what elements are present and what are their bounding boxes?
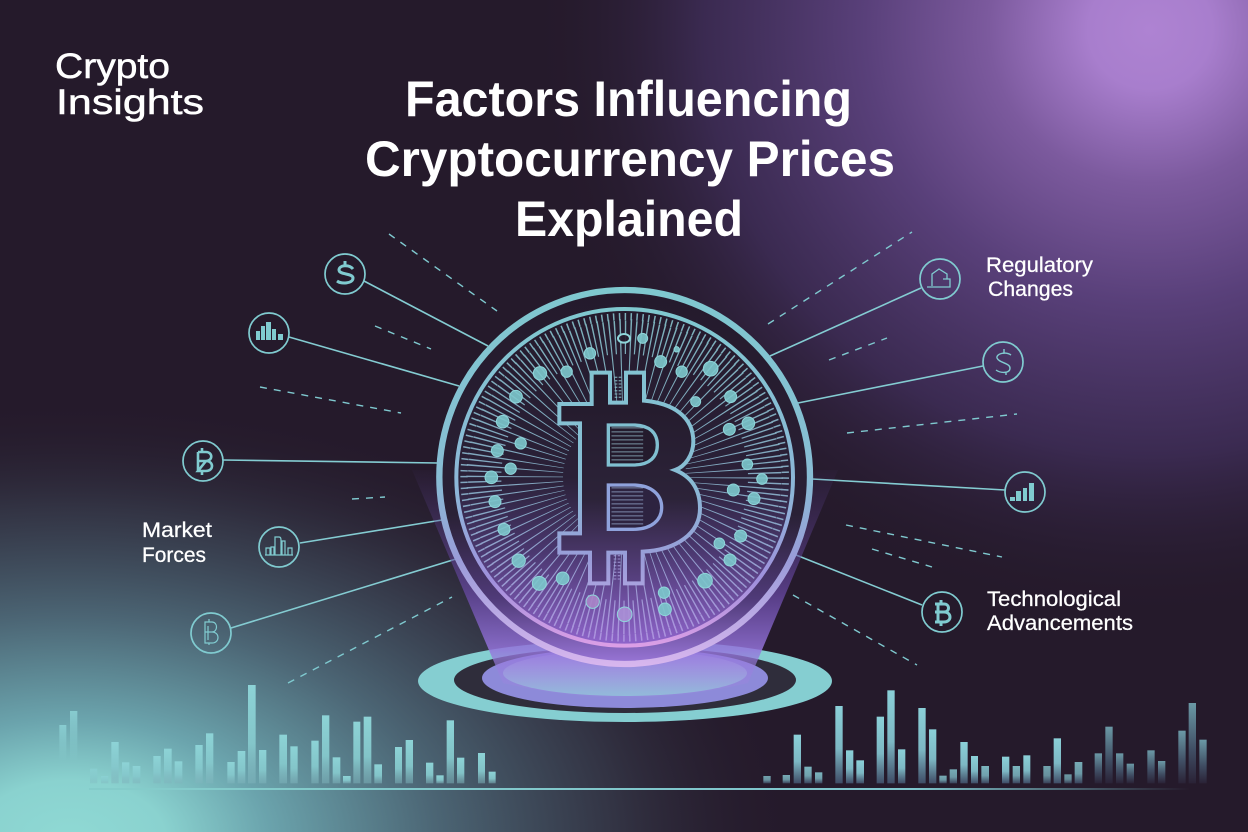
connector lines from coin to icons — [223, 281, 1005, 628]
title: Factors Influencing — [405, 71, 852, 127]
label: Regulatory Changes — [986, 254, 1094, 301]
icon: dollar top left — [325, 254, 365, 294]
bar chart axis — [89, 788, 1190, 790]
icon: bar chart upper left — [249, 313, 289, 353]
icon: bitcoin left — [183, 441, 223, 481]
label: Market Forces — [142, 519, 212, 567]
icon: outlined bitcoin lower left — [191, 613, 231, 653]
brand logo text: Crypto Insights: Crypto — [55, 47, 170, 86]
projection light beam — [412, 470, 838, 698]
bar chart: right — [763, 690, 1207, 783]
label: Market Forces: Forces — [142, 544, 206, 567]
radial rays — [464, 317, 785, 638]
icon: rising bars right — [1005, 472, 1045, 512]
lower counter — [608, 485, 662, 529]
icon: building top right — [920, 259, 960, 299]
hologram platform — [418, 640, 832, 722]
bitcoin coin — [439, 290, 810, 664]
icon: dollar right — [983, 342, 1023, 382]
label: Market Forces: Market — [142, 519, 212, 542]
label: Regulatory Changes: Changes — [988, 278, 1073, 301]
circuit nodes — [485, 333, 767, 622]
upper counter — [608, 425, 657, 465]
title: Cryptocurrency Prices — [365, 131, 895, 187]
label: Technological Advancements: Technological — [987, 588, 1121, 611]
title — [365, 71, 895, 247]
brand logo text: Crypto Insights: Insights — [56, 83, 204, 122]
coin inner disc — [456, 309, 793, 646]
brand logo text: Crypto Insights — [55, 47, 204, 122]
label: Regulatory Changes: Regulatory — [986, 254, 1094, 277]
label: Technological Advancements: Advancements — [987, 612, 1133, 635]
label: Technological Advancements — [987, 588, 1133, 635]
bitcoin symbol — [559, 373, 700, 583]
icon: outlined bars lower left — [259, 527, 299, 567]
icon: bitcoin lower right — [922, 592, 962, 632]
bar chart: left — [59, 685, 496, 783]
coin outer ring — [439, 290, 810, 664]
title: Explained — [515, 191, 743, 247]
decorative dashed rays — [260, 232, 1017, 683]
